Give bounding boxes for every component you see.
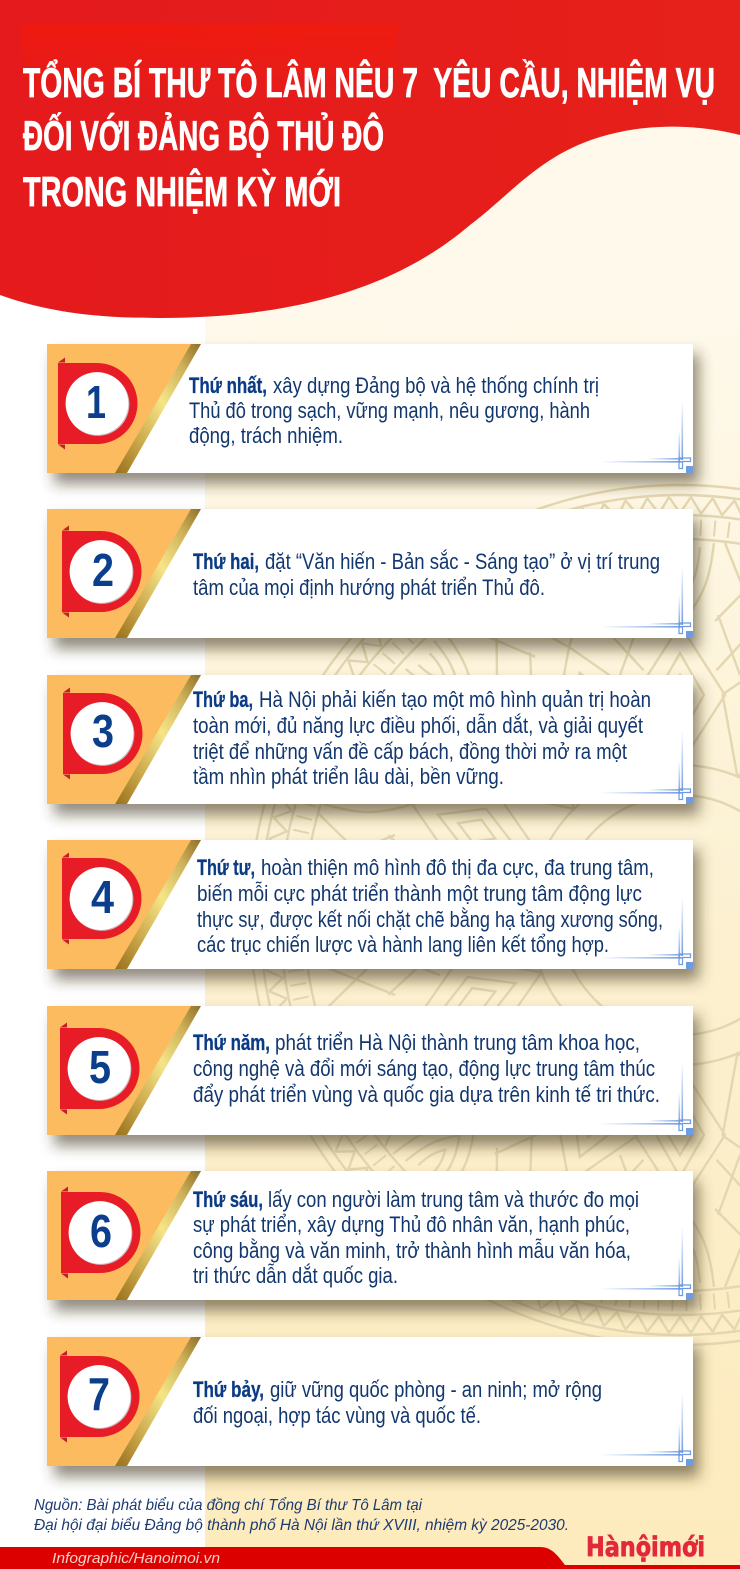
text 2: đặt “Văn hiến - Bản sắc - Sáng tạo” ở vị trí trung	[265, 549, 660, 574]
title	[23, 57, 715, 215]
text 1: động, trách nhiệm.	[189, 423, 343, 448]
source note	[34, 1496, 569, 1534]
text 4: biến mỗi cực phát triển thành một trung tâm động lực	[197, 881, 642, 906]
text 3: Thứ ba,	[193, 687, 253, 712]
badge 1: 1	[86, 376, 106, 428]
text 5: phát triển Hà Nội thành trung tâm khoa học,	[275, 1030, 640, 1055]
source note: Nguồn: Bài phát biểu của đồng chí Tổng Bí thư Tô Lâm tại	[34, 1496, 422, 1514]
text 5: đẩy phát triển vùng và quốc gia dựa trên kinh tế tri thức.	[193, 1082, 660, 1107]
badge 2: 2	[92, 544, 114, 596]
card 4	[47, 840, 699, 980]
badge 7	[60, 1350, 140, 1442]
text 6	[193, 1187, 639, 1288]
text 6: lấy con người làm trung tâm và thước đo mọi	[268, 1187, 639, 1212]
background seal pattern	[179, 414, 740, 1416]
card 5	[47, 1006, 699, 1146]
text 3	[193, 687, 651, 789]
footer bar: Infographic/Hanoimoi.vn	[52, 1550, 220, 1567]
title: TRONG NHIỆM KỲ MỚI	[23, 167, 341, 215]
badge 5: 5	[89, 1041, 111, 1093]
text 7: Thứ bảy,	[193, 1377, 264, 1402]
text 2: Thứ hai,	[193, 549, 259, 574]
text 1	[189, 373, 599, 448]
text 7: giữ vững quốc phòng - an ninh; mở rộng	[270, 1377, 602, 1402]
footer bar	[0, 1547, 740, 1569]
badge 6	[61, 1186, 140, 1278]
text 7: đối ngoại, hợp tác vùng và quốc tế.	[193, 1403, 481, 1428]
text 5: Thứ năm,	[193, 1030, 270, 1055]
text 4: hoàn thiện mô hình đô thị đa cực, đa trung tâm,	[261, 855, 654, 880]
text 4: các trục chiến lược và hành lang liên kết tổng hợp.	[197, 932, 609, 957]
text 6: sự phát triển, xây dựng Thủ đô nhân văn, hạnh phúc,	[193, 1212, 630, 1237]
badge 7: 7	[88, 1368, 110, 1420]
badge 5	[60, 1022, 140, 1114]
text 3: triệt để những vấn đề cấp bách, đồng thời mở ra một	[193, 739, 627, 764]
text 1: Thủ đô trong sạch, vững mạnh, nêu gương, hành	[189, 398, 590, 423]
text 6: tri thức dẫn dắt quốc gia.	[193, 1263, 398, 1288]
source note: Đại hội đại biểu Đảng bộ thành phố Hà Nội lần thứ XVIII, nhiệm kỳ 2025-2030.	[34, 1516, 569, 1534]
card 2	[47, 509, 699, 649]
card 3	[47, 675, 699, 815]
text 1: xây dựng Đảng bộ và hệ thống chính trị	[273, 373, 599, 398]
text 2	[193, 549, 660, 600]
badge 6: 6	[90, 1205, 112, 1257]
card 7	[47, 1337, 699, 1477]
text 4	[197, 855, 663, 957]
badge 2	[62, 526, 142, 618]
badge 1	[58, 358, 138, 450]
text 3: toàn mới, đủ năng lực điều phối, dẫn dắt, và giải quyết	[193, 713, 643, 738]
logo: Hànộimới: Hànộimới	[586, 1532, 705, 1563]
text 6: công bằng và văn minh, trở thành hình mẫu văn hóa,	[193, 1238, 631, 1263]
card 1	[47, 344, 699, 484]
red header wave	[0, 0, 740, 318]
badge 4	[62, 852, 142, 944]
badge 3	[63, 688, 142, 780]
text 4: Thứ tư,	[197, 855, 255, 880]
text 5: công nghệ và đổi mới sáng tạo, động lực trung tâm thúc	[193, 1056, 655, 1081]
text 7	[193, 1377, 602, 1428]
text 1: Thứ nhất,	[189, 373, 267, 398]
card 6	[47, 1171, 699, 1311]
text 6: Thứ sáu,	[193, 1187, 263, 1212]
text 5	[193, 1030, 660, 1107]
text 3: Hà Nội phải kiến tạo một mô hình quản trị hoàn	[259, 687, 651, 712]
title: ĐỐI VỚI ĐẢNG BỘ THỦ ĐÔ	[23, 111, 384, 159]
text 2: tâm của mọi định hướng phát triển Thủ đô.	[193, 575, 545, 600]
text 3: tầm nhìn phát triển lâu dài, bền vững.	[193, 764, 504, 789]
badge 4: 4	[91, 871, 114, 923]
badge 3: 3	[92, 705, 114, 757]
